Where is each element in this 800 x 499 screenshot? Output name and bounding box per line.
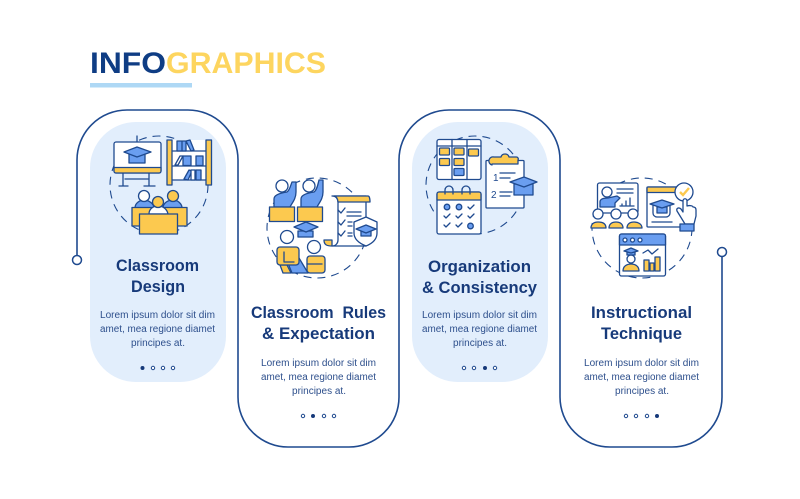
panel: blue background card 3	[412, 122, 548, 382]
title: GRAPHICS	[166, 47, 326, 80]
icon: organization and consistency: 1	[493, 173, 499, 184]
text block: card 1 body: amet, mea regione diamet	[100, 324, 215, 335]
heading: Classroom Design: Classroom	[116, 256, 199, 275]
heading: Organization & Consistency: & Consistency	[422, 278, 538, 297]
text block: card 3 body: amet, mea regione diamet	[422, 324, 537, 335]
text block: card 3 body: principes at.	[453, 338, 507, 349]
icon: classroom design	[110, 136, 212, 234]
text block: card 3 body	[422, 310, 537, 349]
heading: Classroom Rules & Expectation: Classroom Rules	[251, 303, 386, 322]
text block: card 1 body: Lorem ipsum dolor sit dim	[100, 310, 215, 321]
pagination dots card 1	[141, 366, 175, 370]
text block: card 3 body: Lorem ipsum dolor sit dim	[422, 310, 537, 321]
icon: instructional technique	[591, 178, 696, 278]
text block: card 2 body: amet, mea regione diamet	[261, 372, 376, 383]
heading: Organization & Consistency	[422, 257, 538, 297]
pagination dots card 2	[301, 414, 336, 418]
heading: Instructional Technique: Instructional	[591, 303, 692, 322]
heading: Instructional Technique: Technique	[601, 324, 682, 343]
text block: card 1 body	[100, 310, 215, 349]
heading: Organization & Consistency: Organization	[428, 257, 531, 276]
text block: card 1 body: principes at.	[131, 338, 185, 349]
heading: Classroom Rules & Expectation	[251, 303, 386, 343]
title	[90, 47, 326, 88]
serpentine outline connector	[72, 110, 726, 447]
text block: card 4 body: Lorem ipsum dolor sit dim	[584, 358, 699, 369]
heading: Classroom Design: Design	[131, 277, 185, 296]
text block: card 4 body	[584, 358, 699, 397]
panel: blue background card 1	[90, 122, 226, 382]
text block: card 4 body: principes at.	[615, 386, 669, 397]
icon: organization and consistency: 2	[491, 190, 497, 201]
icon: organization and consistency	[426, 136, 537, 234]
title: INFO	[90, 47, 166, 80]
heading: Classroom Design	[116, 256, 199, 296]
text block: card 2 body: principes at.	[292, 386, 346, 397]
pagination dots card 4	[624, 414, 658, 418]
heading: Instructional Technique	[591, 303, 692, 343]
text block: card 2 body: Lorem ipsum dolor sit dim	[261, 358, 376, 369]
text block: card 2 body	[261, 358, 376, 397]
icon: classroom rules	[267, 178, 377, 278]
text block: card 4 body: amet, mea regione diamet	[584, 372, 699, 383]
heading: Classroom Rules & Expectation: & Expectation	[262, 324, 375, 343]
pagination dots card 3	[462, 366, 497, 370]
